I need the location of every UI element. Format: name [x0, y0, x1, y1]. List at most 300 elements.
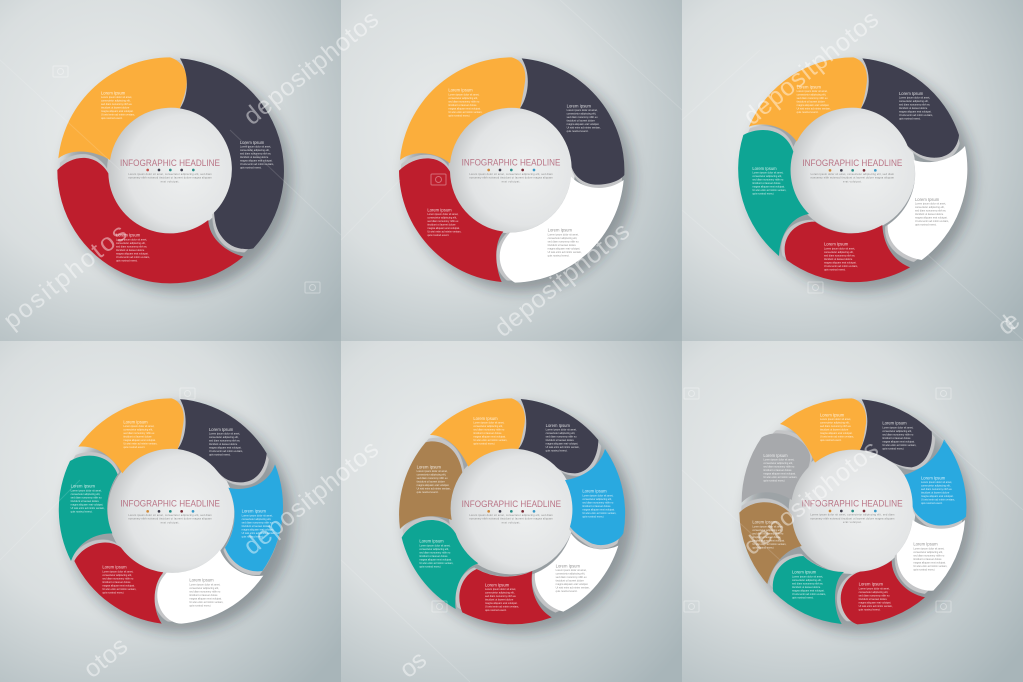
headline block [802, 499, 903, 524]
text: dark segment: consectetur adipiscing elit, [209, 436, 239, 439]
text: red segment: magna aliquam erat volutpat. [859, 601, 891, 604]
text: red segment: sed diam nonummy nibh eu [102, 577, 134, 580]
text: red segment [102, 565, 137, 594]
text: teal segment: Lorem Ipsum [752, 166, 777, 171]
text: red segment: consectetur adipiscing elit, [859, 591, 888, 594]
text: white segment: consectetur adipiscing elit, [548, 237, 577, 240]
text: brown segment: tincidunt ut laoreet dolore [417, 480, 446, 483]
text: dark segment [240, 140, 274, 170]
text: blue segment: Lorem Ipsum [582, 489, 607, 494]
text: dark segment: consectetur adipiscing elit, [882, 430, 912, 433]
text: orange segment: tincidunt ut laoreet dolore [797, 100, 826, 103]
text: blue segment: tincidunt ut laoreet dolore [582, 505, 611, 508]
headline block [802, 158, 902, 183]
text: blue segment: quis nostrud exerci. [921, 502, 943, 505]
text: dark segment: Lorem ipsum dolor sit amet, [546, 429, 577, 432]
text: dark segment: tincidunt ut laoreet dolore [567, 119, 596, 122]
text: orange segment: Ut wisi enim ad minim veniam, [797, 107, 831, 110]
text: white segment: consectetur adipiscing elit, [556, 572, 585, 575]
ring segments [399, 398, 625, 624]
text: teal segment: Lorem Ipsum [419, 539, 444, 544]
text: blue segment [921, 475, 955, 505]
text: white segment: sed diam nonummy nibh eu [913, 554, 945, 557]
text: red segment: sed diam nonummy nibh eu [824, 254, 856, 257]
text: blue segment: magna aliquam erat volutpat. [582, 508, 615, 511]
segment: red [785, 222, 910, 282]
text: teal segment: Lorem Ipsum [71, 484, 95, 489]
text: white segment [548, 228, 582, 257]
segment: red [459, 569, 552, 624]
text: white segment [556, 563, 590, 593]
text: white segment: magna aliquam erat volutpat. [189, 597, 222, 600]
segment: teal [59, 456, 118, 561]
text: gray segment [763, 453, 798, 483]
text: dark segment: sed diam nonummy nibh eu [567, 116, 598, 119]
text: blue segment [242, 509, 276, 538]
segment: white [500, 177, 624, 283]
text: red segment: quis nostrud exerci. [116, 259, 138, 262]
text: red segment: Ut wisi enim ad minim veniam, [859, 605, 893, 608]
text: orange segment: Lorem Ipsum [820, 412, 845, 417]
segment: orange [749, 57, 867, 142]
text: gray segment: sed diam nonummy nibh eu [763, 466, 795, 469]
segment: white [888, 146, 967, 260]
text: blue segment: quis nostrud exerci. [582, 515, 604, 518]
text: dark segment [567, 103, 601, 133]
headline block: INFOGRAPHIC HEADLINE [802, 158, 902, 168]
text: orange segment: tincidunt ut laoreet dolore [101, 106, 130, 109]
headline block: nonummy nibh euismod tincidunt ut laoreet dolore magna aliquam [128, 518, 212, 521]
segment: red [399, 158, 503, 282]
panel: six segment ring [0, 341, 341, 682]
text: teal segment: sed diam nonummy nibh eu [792, 582, 824, 585]
text: orange segment: sed diam nonummy nibh eu [797, 97, 828, 100]
text: dark segment [209, 427, 243, 457]
segment: red [841, 561, 925, 624]
text: white segment [189, 578, 224, 607]
text: orange segment: Lorem ipsum dolor sit amet, [820, 418, 851, 421]
text: orange segment: quis nostrud exerci. [101, 117, 123, 120]
text: blue segment: magna aliquam erat volutpat. [921, 495, 954, 498]
headline block: INFOGRAPHIC HEADLINE [120, 158, 220, 168]
text: orange segment: magna aliquam erat volutpat. [797, 104, 829, 107]
text: dark segment: tincidunt ut laoreet dolore [882, 437, 911, 440]
headline block [120, 499, 220, 524]
text: white segment: tincidunt ut laoreet dolore [913, 558, 942, 561]
text: blue segment: sed diam nonummy nibh eu [582, 501, 614, 504]
text: teal segment: Lorem Ipsum [792, 570, 817, 575]
text: red segment: Lorem Ipsum [485, 582, 510, 587]
text: orange segment: Ut wisi enim ad minim veniam, [448, 111, 483, 114]
text: dark segment: consectetur adipiscing elit, [899, 100, 929, 103]
text: orange segment: Lorem ipsum dolor sit amet, [473, 422, 505, 425]
segment: blue [225, 464, 283, 571]
text: dark segment: consectetur adipiscing elit, [567, 112, 596, 115]
text: teal segment: Lorem ipsum dolor sit amet, [792, 575, 823, 578]
headline block: INFOGRAPHIC HEADLINE [802, 499, 903, 509]
text: dark segment: Lorem Ipsum [209, 427, 234, 432]
text: dark segment: Lorem ipsum dolor sit amet, [209, 433, 240, 436]
text: white segment: Lorem Ipsum [548, 228, 572, 233]
text: dark segment: consectetur adipiscing elit, [546, 432, 575, 435]
text: orange segment: Ut wisi enim ad minim veniam, [123, 442, 158, 445]
text: red segment: sed diam nonummy nibh eu [859, 594, 890, 597]
text: orange segment: consectetur adipiscing elit, [448, 97, 478, 100]
text: blue segment: quis nostrud exerci. [242, 535, 264, 538]
text: orange segment: consectetur adipiscing elit, [473, 425, 503, 428]
text: dark segment: Lorem Ipsum [567, 103, 591, 108]
text: dark segment: quis nostrud exerci. [882, 447, 904, 450]
segment: blue [904, 439, 966, 526]
headline block: nonummy nibh euismod tincidunt ut laoreet dolore magna aliquam [469, 177, 553, 180]
text: orange segment: consectetur adipiscing elit, [101, 99, 131, 102]
text: dark segment: sed diam nonummy nibh eu [209, 440, 241, 443]
text: brown segment: consectetur adipiscing elit, [752, 529, 782, 532]
text: orange segment: consectetur adipiscing elit, [797, 93, 826, 96]
text: orange segment: sed diam nonummy nibh eu [820, 425, 852, 428]
text: orange segment: Lorem Ipsum [101, 90, 126, 95]
text: white segment: consectetur adipiscing elit, [913, 551, 943, 554]
text: teal segment [792, 570, 826, 599]
text: blue segment: Lorem Ipsum [921, 475, 946, 480]
text: white segment: tincidunt ut laoreet dolore [189, 594, 218, 597]
text: white segment: quis nostrud exerci. [189, 604, 211, 607]
text: red segment: tincidunt ut laoreet dolore [102, 581, 131, 584]
text: teal segment: Ut wisi enim ad minim veniam, [71, 507, 105, 510]
segment: dark [520, 58, 624, 185]
segment: brown [739, 502, 802, 584]
text: white segment: Ut wisi enim ad minim veniam, [189, 601, 224, 604]
text: white segment: Lorem Ipsum [913, 542, 938, 547]
ring segments [738, 57, 967, 282]
text: depositphotos watermarks: depositphotos [489, 217, 635, 343]
text: teal segment: quis nostrud exerci. [419, 565, 441, 568]
text: white segment: Lorem ipsum dolor sit amet, [548, 233, 579, 236]
text: red segment: sed diam nonummy nibh eu [116, 245, 148, 248]
text: white segment: Lorem Ipsum [189, 578, 214, 583]
text: orange segment: Lorem Ipsum [448, 88, 473, 93]
text: depositphotos watermarks: depositphotos [238, 435, 384, 561]
panel: four segment ring [341, 0, 682, 341]
text: depositphotos watermarks: positphotos [0, 219, 132, 335]
text: teal segment: consectetur adipiscing elit, [419, 548, 449, 551]
text: white segment: magna aliquam erat volutpat. [548, 247, 580, 250]
text: white segment: Ut wisi enim ad minim veniam, [915, 220, 949, 223]
text: teal segment: magna aliquam erat volutpat. [752, 186, 785, 189]
text: gray segment: Ut wisi enim ad minim veniam, [763, 476, 798, 479]
headline block: Lorem ipsum dolor sit amet, consectetur adipiscing elit, sed diam [128, 173, 212, 176]
segment: orange [780, 398, 866, 463]
text: teal segment: magna aliquam erat volutpat. [792, 589, 825, 592]
text: dark segment: sed diam nonummy nibh eu [882, 433, 914, 436]
ring segments [739, 398, 966, 624]
text: white segment: Lorem ipsum dolor sit amet, [915, 203, 946, 206]
text: white segment: Lorem ipsum dolor sit amet, [189, 583, 221, 586]
text: blue segment: tincidunt ut laoreet dolore [921, 491, 950, 494]
text: brown segment: magna aliquam erat volutpat. [417, 484, 449, 487]
text: brown segment: consectetur adipiscing elit, [417, 473, 446, 476]
text: dark segment: Lorem Ipsum [546, 423, 570, 428]
text: teal segment: Lorem ipsum dolor sit amet, [752, 172, 784, 175]
ring segments [59, 398, 283, 624]
text: orange segment: quis nostrud exerci. [448, 114, 470, 117]
text: orange segment: Lorem ipsum dolor sit amet, [797, 90, 828, 93]
text: blue segment: Ut wisi enim ad minim veniam, [921, 498, 955, 501]
headline block: erat volutpat. [502, 521, 521, 524]
text: teal segment [71, 484, 105, 513]
panel: five segment ring [682, 0, 1023, 341]
text: orange segment [473, 416, 508, 446]
text: brown segment [752, 520, 787, 549]
text: dark segment: Lorem Ipsum [882, 421, 907, 426]
text: red segment: quis nostrud exerci. [102, 591, 124, 594]
text: teal segment: quis nostrud exerci. [71, 510, 93, 513]
text: orange segment: magna aliquam erat volutpat. [448, 107, 481, 110]
text: red segment: quis nostrud exerci. [824, 268, 846, 271]
text: white segment [913, 542, 948, 571]
text: teal segment [419, 539, 454, 568]
text: teal segment: Lorem ipsum dolor sit amet, [71, 489, 102, 492]
segment: white [535, 533, 618, 612]
text: teal segment: Lorem ipsum dolor sit amet, [419, 544, 451, 547]
text: orange segment: magna aliquam erat volutpat. [473, 436, 506, 439]
text: orange segment: Lorem ipsum dolor sit amet, [123, 425, 155, 428]
text: dark segment: quis nostrud exerci. [567, 130, 589, 133]
text: red segment: quis nostrud exerci. [859, 608, 881, 611]
text: orange segment [123, 419, 158, 449]
text: white segment: magna aliquam erat volutpat. [915, 217, 948, 220]
text: blue segment: Ut wisi enim ad minim veniam, [242, 532, 276, 535]
text: red segment: consectetur adipiscing elit, [485, 591, 515, 594]
text: dark segment: Lorem ipsum dolor sit amet, [567, 109, 598, 112]
text: orange segment: tincidunt ut laoreet dolore [123, 435, 152, 438]
headline block: nonummy nibh euismod tincidunt ut laoreet dolore magna aliquam [810, 517, 894, 520]
text: depositphotos watermarks: depositphotos [738, 5, 884, 131]
text: red segment: Ut wisi enim ad minim veniam, [116, 256, 150, 259]
segment: gray [742, 433, 810, 503]
headline block: Lorem ipsum dolor sit amet, consectetur adipiscing elit, sed diam [811, 173, 894, 176]
text: blue segment: magna aliquam erat volutpat. [242, 528, 274, 531]
text: dark segment [546, 423, 580, 453]
text: white segment: Lorem Ipsum [556, 563, 580, 568]
text: white segment: magna aliquam erat volutpat. [913, 561, 946, 564]
text: red segment: consectetur adipiscing elit, [102, 574, 132, 577]
text: blue segment: sed diam nonummy nibh eu [921, 488, 953, 491]
text: red segment: tincidunt ut laoreet dolore [824, 258, 853, 261]
text: red segment: sed diam nonummy nibh eu [427, 220, 459, 223]
text: blue segment: consectetur adipiscing elit, [242, 518, 271, 521]
text: brown segment: Lorem ipsum dolor sit amet, [752, 525, 784, 528]
text: red segment: consectetur adipiscing elit, [427, 216, 457, 219]
segment: blue [565, 449, 625, 545]
text: dark segment: magna aliquam erat volutpat. [567, 123, 599, 126]
text: red segment: tincidunt ut laoreet dolore [116, 249, 145, 252]
text: orange segment [448, 88, 483, 117]
text: gray segment: tincidunt ut laoreet dolore [763, 469, 792, 472]
text: red segment [485, 582, 519, 612]
text: dark segment: Lorem ipsum dolor sit amet, [882, 426, 914, 429]
text: blue segment [582, 489, 617, 518]
text: orange segment: quis nostrud exerci. [820, 439, 842, 442]
text: blue segment: Lorem ipsum dolor sit amet, [242, 514, 273, 517]
text: white segment: sed diam nonummy nibh eu [915, 210, 947, 213]
text: dark segment: sed diam nonummy nibh eu [899, 104, 931, 107]
segment: white [157, 550, 263, 624]
text: white segment: quis nostrud exerci. [915, 224, 937, 227]
text: orange segment: Lorem Ipsum [473, 416, 498, 421]
text: brown segment: sed diam nonummy nibh eu [752, 532, 784, 535]
text: red segment: quis nostrud exerci. [485, 609, 507, 612]
text: orange segment: Ut wisi enim ad minim veniam, [820, 435, 854, 438]
text: orange segment: quis nostrud exerci. [797, 111, 819, 114]
headline block: nonummy nibh euismod tincidunt ut laoreet dolore magna aliquam [811, 177, 894, 180]
text: white segment: quis nostrud exerci. [556, 590, 578, 593]
text: orange segment: sed diam nonummy nibh eu [123, 432, 155, 435]
text: brown segment [417, 464, 451, 494]
text: white segment: magna aliquam erat volutpat. [556, 583, 588, 586]
text: dark segment: magna aliquam erat volutpat. [882, 440, 915, 443]
text: dark segment: tincidunt ut laoreet dolore [240, 156, 269, 159]
segment: brown [399, 441, 462, 529]
segment: red [57, 158, 243, 283]
text: dark segment: Lorem ipsum dolor sit amet, [240, 146, 271, 149]
text: dark segment: Ut wisi enim ad minim veniam, [209, 450, 243, 453]
text: orange segment: sed diam nonummy nibh eu [448, 100, 480, 103]
text: orange segment [101, 90, 135, 120]
text: white segment: tincidunt ut laoreet dolore [548, 244, 577, 247]
text: blue segment: Lorem ipsum dolor sit amet, [582, 494, 614, 497]
headline block: Lorem ipsum dolor sit amet, consectetur adipiscing elit, sed diam [128, 514, 212, 517]
text: gray segment: quis nostrud exerci. [763, 480, 785, 483]
text: white segment: Lorem Ipsum [915, 197, 940, 202]
text: dark segment: Ut wisi enim ad minim veniam, [567, 126, 601, 129]
text: orange segment: tincidunt ut laoreet dolore [448, 104, 477, 107]
text: orange segment: Lorem Ipsum [797, 84, 821, 89]
text: white segment: tincidunt ut laoreet dolore [915, 213, 944, 216]
segment: orange [78, 398, 184, 473]
text: teal segment: consectetur adipiscing elit, [71, 493, 100, 496]
text: brown segment: quis nostrud exerci. [752, 546, 774, 549]
text: white segment: sed diam nonummy nibh eu [189, 590, 221, 593]
text: orange segment: consectetur adipiscing elit, [123, 428, 153, 431]
text: blue segment: consectetur adipiscing elit, [582, 498, 612, 501]
text: red segment: Lorem ipsum dolor sit amet, [824, 247, 855, 250]
text: orange segment: sed diam nonummy nibh eu [101, 103, 133, 106]
text: dark segment: magna aliquam erat volutpat. [209, 447, 242, 450]
ring segments [57, 57, 284, 283]
text: teal segment: consectetur adipiscing elit, [752, 175, 782, 178]
segment: dark [518, 399, 598, 473]
text: dark segment: Ut wisi enim ad minim veniam, [899, 114, 933, 117]
text: brown segment: sed diam nonummy nibh eu [417, 477, 448, 480]
text: dark segment: Ut wisi enim ad minim veniam, [546, 446, 580, 449]
text: white segment [915, 197, 949, 227]
text: dark segment: magna aliquam erat volutpat. [240, 160, 273, 163]
text: teal segment: sed diam nonummy nibh eu [419, 551, 451, 554]
text: blue segment: Ut wisi enim ad minim veniam, [582, 512, 617, 515]
text: dark segment: Ut wisi enim ad minim veniam, [882, 444, 917, 447]
text: blue segment: sed diam nonummy nibh eu [242, 521, 273, 524]
text: orange segment: quis nostrud exerci. [123, 446, 145, 449]
headline block [462, 499, 561, 524]
text: brown segment: Lorem Ipsum [417, 464, 441, 469]
text: white segment: quis nostrud exerci. [913, 568, 935, 571]
headline block: INFOGRAPHIC HEADLINE [462, 499, 561, 509]
text: red segment: magna aliquam erat volutpat. [102, 584, 135, 587]
text: teal segment: Ut wisi enim ad minim veniam, [752, 189, 787, 192]
text: red segment: tincidunt ut laoreet dolore [427, 223, 456, 226]
text: red segment: consectetur adipiscing elit, [824, 251, 854, 254]
text: teal segment [752, 166, 787, 196]
text: red segment: Ut wisi enim ad minim veniam, [427, 230, 462, 233]
text: white segment: quis nostrud exerci. [548, 254, 570, 257]
text: red segment: Lorem ipsum dolor sit amet, [102, 570, 134, 573]
text: dark segment: quis nostrud exerci. [546, 450, 568, 453]
text: dark segment: magna aliquam erat volutpat. [546, 443, 578, 446]
text: teal segment: Ut wisi enim ad minim veniam, [419, 562, 454, 565]
segment: dark [861, 58, 959, 158]
text: brown segment: Lorem Ipsum [752, 520, 777, 525]
text: dark segment: consectetur adipiscing elit, [240, 149, 270, 152]
text: red segment: tincidunt ut laoreet dolore [485, 598, 514, 601]
text: white segment: sed diam nonummy nibh eu [556, 576, 587, 579]
headline block: INFOGRAPHIC HEADLINE [462, 158, 560, 168]
text: orange segment: tincidunt ut laoreet dolore [820, 428, 849, 431]
text: orange segment: Lorem ipsum dolor sit amet, [448, 93, 480, 96]
panel: eight segment ring [682, 341, 1023, 682]
text: teal segment: quis nostrud exerci. [792, 596, 814, 599]
text: orange segment: Ut wisi enim ad minim veniam, [473, 439, 508, 442]
text: dark segment: Lorem Ipsum [240, 140, 265, 145]
text: orange segment: Ut wisi enim ad minim veniam, [101, 113, 135, 116]
text: red segment: magna aliquam erat volutpat. [824, 261, 857, 264]
text: brown segment: quis nostrud exerci. [417, 491, 439, 494]
segment: teal [402, 520, 478, 609]
text: white segment: Lorem ipsum dolor sit amet, [913, 547, 945, 550]
segment: dark [178, 399, 267, 482]
text: teal segment: consectetur adipiscing elit, [792, 579, 822, 582]
text: teal segment: tincidunt ut laoreet dolore [419, 555, 448, 558]
text: dark segment: tincidunt ut laoreet dolore [899, 107, 928, 110]
text: orange segment: consectetur adipiscing elit, [820, 421, 850, 424]
text: white segment: consectetur adipiscing elit, [189, 587, 219, 590]
headline block [462, 158, 560, 183]
text: dark segment: Lorem ipsum dolor sit amet, [899, 97, 930, 100]
text: teal segment: sed diam nonummy nibh eu [71, 496, 102, 499]
headline block: nonummy nibh euismod tincidunt ut laoreet dolore magna aliquam [469, 518, 553, 521]
text: dark segment: magna aliquam erat volutpat. [899, 111, 932, 114]
text: teal segment: tincidunt ut laoreet dolore [792, 586, 821, 589]
headline block: nonummy nibh euismod tincidunt ut laoreet dolore magna aliquam [128, 177, 212, 180]
text: white segment: Ut wisi enim ad minim veniam, [548, 251, 582, 254]
text: red segment: Ut wisi enim ad minim veniam, [102, 588, 137, 591]
segment: orange [430, 398, 525, 467]
text: red segment: Lorem Ipsum [859, 582, 883, 587]
headline block: erat volutpat. [843, 180, 862, 183]
headline block: Lorem ipsum dolor sit amet, consectetur adipiscing elit, sed diam [469, 173, 553, 176]
text: dark segment: quis nostrud exerci. [209, 454, 231, 457]
headline block [120, 158, 220, 183]
segment: dark [860, 399, 932, 467]
text: dark segment: tincidunt ut laoreet dolore [546, 439, 575, 442]
text: white segment: Ut wisi enim ad minim veniam, [913, 565, 948, 568]
text: teal segment: Ut wisi enim ad minim veniam, [792, 593, 826, 596]
text: red segment: Lorem ipsum dolor sit amet, [485, 588, 516, 591]
text: teal segment: tincidunt ut laoreet dolore [71, 500, 100, 503]
text: red segment: Ut wisi enim ad minim veniam, [485, 605, 519, 608]
text: orange segment [797, 84, 831, 114]
text: gray segment: consectetur adipiscing elit, [763, 462, 793, 465]
